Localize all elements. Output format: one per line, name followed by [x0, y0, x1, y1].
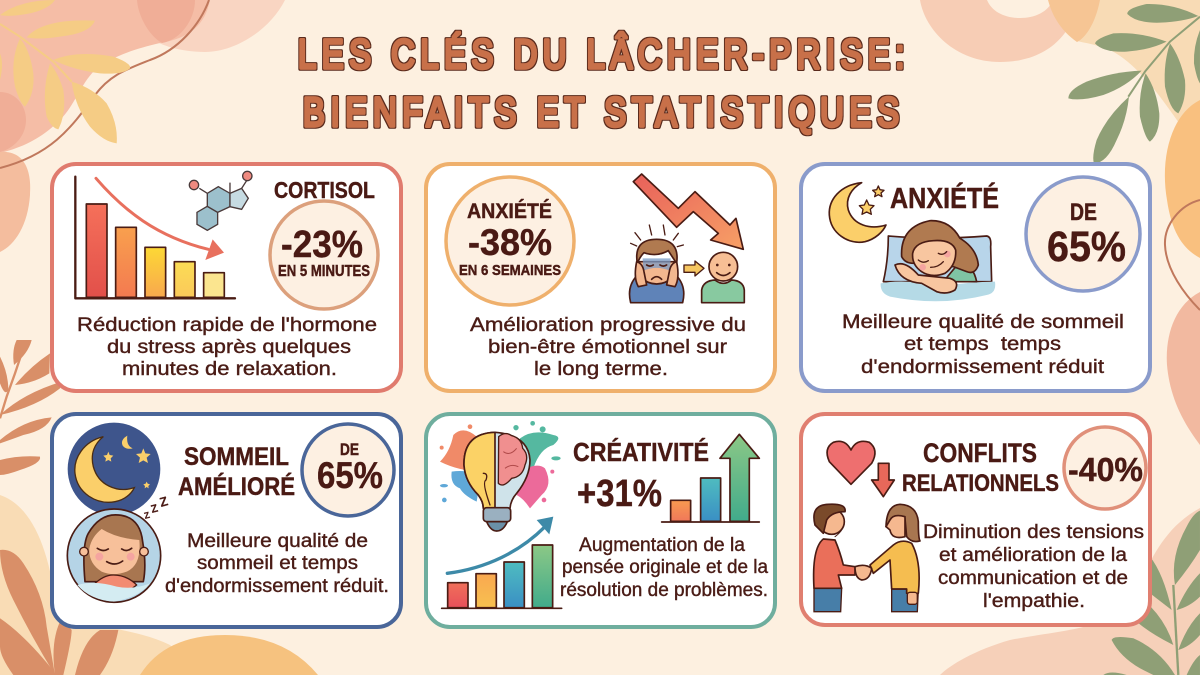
panel: cortisol — [52, 164, 401, 391]
bar chart: falling cortisol — [75, 177, 235, 298]
heading: improved sleep: AMÉLIORÉ — [178, 472, 295, 501]
text: creativity description: résolution de problèmes. — [560, 580, 768, 601]
stat badge: -23% in 5 minutes — [270, 201, 378, 309]
stat badge: anxiety -38%: EN 6 SEMAINES — [459, 263, 561, 279]
leaves: green branch bottom right — [1103, 511, 1200, 675]
icon: worried person to calm person — [630, 225, 744, 303]
text: conflicts description — [923, 522, 1144, 612]
icon: snoring z letters: Z — [150, 502, 160, 516]
stat badge: 65%: DE — [340, 440, 359, 459]
leaves: green branch top right — [1068, 4, 1200, 163]
text: improved sleep description: Meilleure qualité de — [187, 531, 368, 552]
text: conflicts description: l'empathie. — [983, 591, 1085, 612]
icon: sleeping girl — [881, 221, 995, 301]
stat badge: -40%: -40% — [1068, 451, 1143, 488]
text: cortisol description: du stress après quelques — [107, 337, 351, 358]
text: anxiety description — [470, 315, 746, 380]
arrow: zigzag downward — [633, 174, 743, 249]
text: cortisol description: Réduction rapide de l'hormone — [77, 315, 377, 336]
stat badge: anxiety -38%: -38% — [468, 222, 552, 263]
text: creativity description: Augmentation de la — [579, 535, 745, 556]
stat badge: 65%: 65% — [1047, 223, 1126, 271]
icon: snoring z letters: Z — [143, 510, 151, 521]
text: improved sleep description: d'endormissement réduit. — [165, 576, 389, 597]
panel: relationship conflicts — [801, 414, 1150, 625]
panel: improved sleep — [52, 414, 401, 627]
stat badge: 65%: DE — [1070, 199, 1097, 226]
text: improved sleep description: sommeil et temps — [197, 553, 358, 574]
icon: snoring z letters: Z — [158, 493, 170, 510]
heading: improved sleep — [178, 443, 295, 501]
stat badge: -23% in 5 minutes: EN 5 MINUTES — [278, 263, 370, 280]
icon: cortisol molecule — [189, 171, 252, 230]
stat badge: 65% — [302, 424, 394, 516]
text: conflicts description: Diminution des tensions — [923, 522, 1144, 543]
text: anxiety description: Amélioration progressive du — [470, 315, 746, 336]
arrow: down — [872, 463, 894, 497]
text: creativity description — [560, 535, 768, 601]
panel: creativity — [426, 414, 775, 627]
stat badge: 65% — [1026, 177, 1140, 291]
bar chart: growth with up arrow — [662, 434, 759, 522]
stat badge: anxiety -38% — [446, 177, 574, 305]
text: cortisol description — [77, 315, 377, 380]
text: conflicts description: et amélioration de la — [939, 545, 1127, 566]
icon: sleeping face — [67, 509, 161, 602]
icon: snoring z letters — [143, 493, 170, 521]
heading: cortisol: CORTISOL — [274, 177, 375, 203]
text: sleep quality description: d'endormissement réduit — [861, 357, 1105, 378]
heading: creativity: CRÉATIVITÉ — [573, 437, 709, 467]
icon: light bulb with brain and paint — [440, 421, 561, 531]
bar chart: rising bars with arrow — [442, 517, 562, 608]
title: BIENFAITS ET STATISTIQUES — [303, 88, 899, 135]
stat badge: anxiety -38%: ANXIÉTÉ — [467, 200, 552, 223]
text: improved sleep description — [165, 531, 389, 597]
heading: anxiety: ANXIÉTÉ — [890, 181, 999, 215]
stat badge: -40% — [1064, 427, 1146, 509]
title: LES CLÉS DU LÂCHER-PRISE: — [298, 30, 904, 77]
text: cortisol description: minutes de relaxation. — [122, 359, 337, 380]
icon: night sky with moon — [68, 423, 160, 515]
heading: relationship conflicts: CONFLITS — [923, 438, 1037, 468]
text: anxiety description: le long terme. — [534, 359, 668, 380]
text: anxiety description: bien-être émotionnel sur — [488, 337, 728, 358]
text: creativity description: pensée originale et de la — [562, 557, 768, 578]
title — [298, 30, 904, 135]
heading: relationship conflicts: RELATIONNELS — [902, 470, 1059, 497]
leaves: yellow branch — [0, 0, 130, 143]
arrow: downward trend — [96, 178, 224, 260]
heading: relationship conflicts — [902, 438, 1059, 497]
icon: heart — [827, 441, 875, 484]
heading: improved sleep: SOMMEIL — [184, 443, 289, 471]
icon: moon and stars — [829, 183, 886, 242]
background shapes: top right — [920, 0, 1200, 445]
stat badge: 65%: 65% — [317, 455, 383, 496]
stat: +31%: +31% — [577, 473, 662, 515]
background shapes: top left — [0, 0, 285, 252]
panel: anxiety 65% — [801, 164, 1150, 391]
text: sleep quality description: et temps temps — [904, 334, 1061, 355]
text: sleep quality description: Meilleure qualité de sommeil — [842, 312, 1124, 333]
leaves: orange branches left — [0, 340, 118, 675]
panel: anxiety six weeks — [426, 164, 775, 391]
background shapes: bottom — [0, 495, 1200, 675]
icon: two people shaking hands — [814, 504, 920, 612]
text: sleep quality description — [842, 312, 1124, 378]
stat badge: -23% in 5 minutes: -23% — [281, 224, 363, 266]
text: conflicts description: communication et de — [938, 568, 1128, 589]
